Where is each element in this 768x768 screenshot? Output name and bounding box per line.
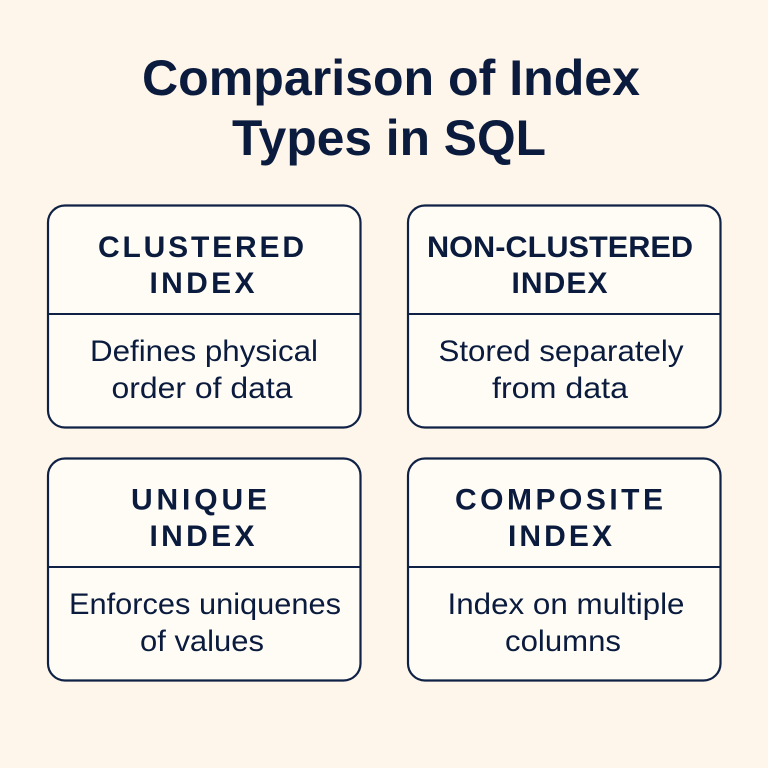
text: non-clustered description: Stored separately: [438, 335, 684, 368]
title: [142, 50, 640, 166]
text: clustered description: Defines physical: [90, 335, 318, 368]
heading: clustered index: INDEX: [150, 267, 254, 300]
text: non-clustered description: [438, 335, 684, 405]
title: Types in SQL: [232, 110, 546, 166]
heading: composite index: [455, 484, 663, 553]
text: unique description: Enforces uniquenes: [69, 588, 341, 621]
heading: non-clustered index: NON-CLUSTERED: [427, 231, 693, 264]
heading: clustered index: CLUSTERED: [98, 231, 304, 264]
title: Comparison of Index: [142, 50, 640, 106]
text: composite description: Index on multiple: [448, 588, 684, 621]
text: clustered description: [90, 335, 318, 405]
text: composite description: [448, 588, 684, 658]
panel: clustered index: [48, 206, 360, 428]
heading: composite index: COMPOSITE: [455, 484, 663, 516]
heading: unique index: INDEX: [150, 520, 254, 553]
panel: non-clustered index: [408, 206, 720, 428]
heading: clustered index: [98, 231, 304, 300]
panel: unique index: [48, 458, 360, 680]
heading: non-clustered index: INDEX: [512, 267, 608, 300]
heading: non-clustered index: [427, 231, 693, 300]
panel: composite index: [408, 458, 720, 680]
text: clustered description: order of data: [112, 372, 293, 405]
text: unique description: [69, 588, 341, 658]
heading: unique index: UNIQUE: [131, 484, 267, 516]
heading: composite index: INDEX: [508, 520, 612, 553]
text: composite description: columns: [505, 625, 621, 658]
text: non-clustered description: from data: [492, 372, 628, 405]
heading: unique index: [131, 484, 267, 553]
text: unique description: of values: [140, 625, 264, 658]
